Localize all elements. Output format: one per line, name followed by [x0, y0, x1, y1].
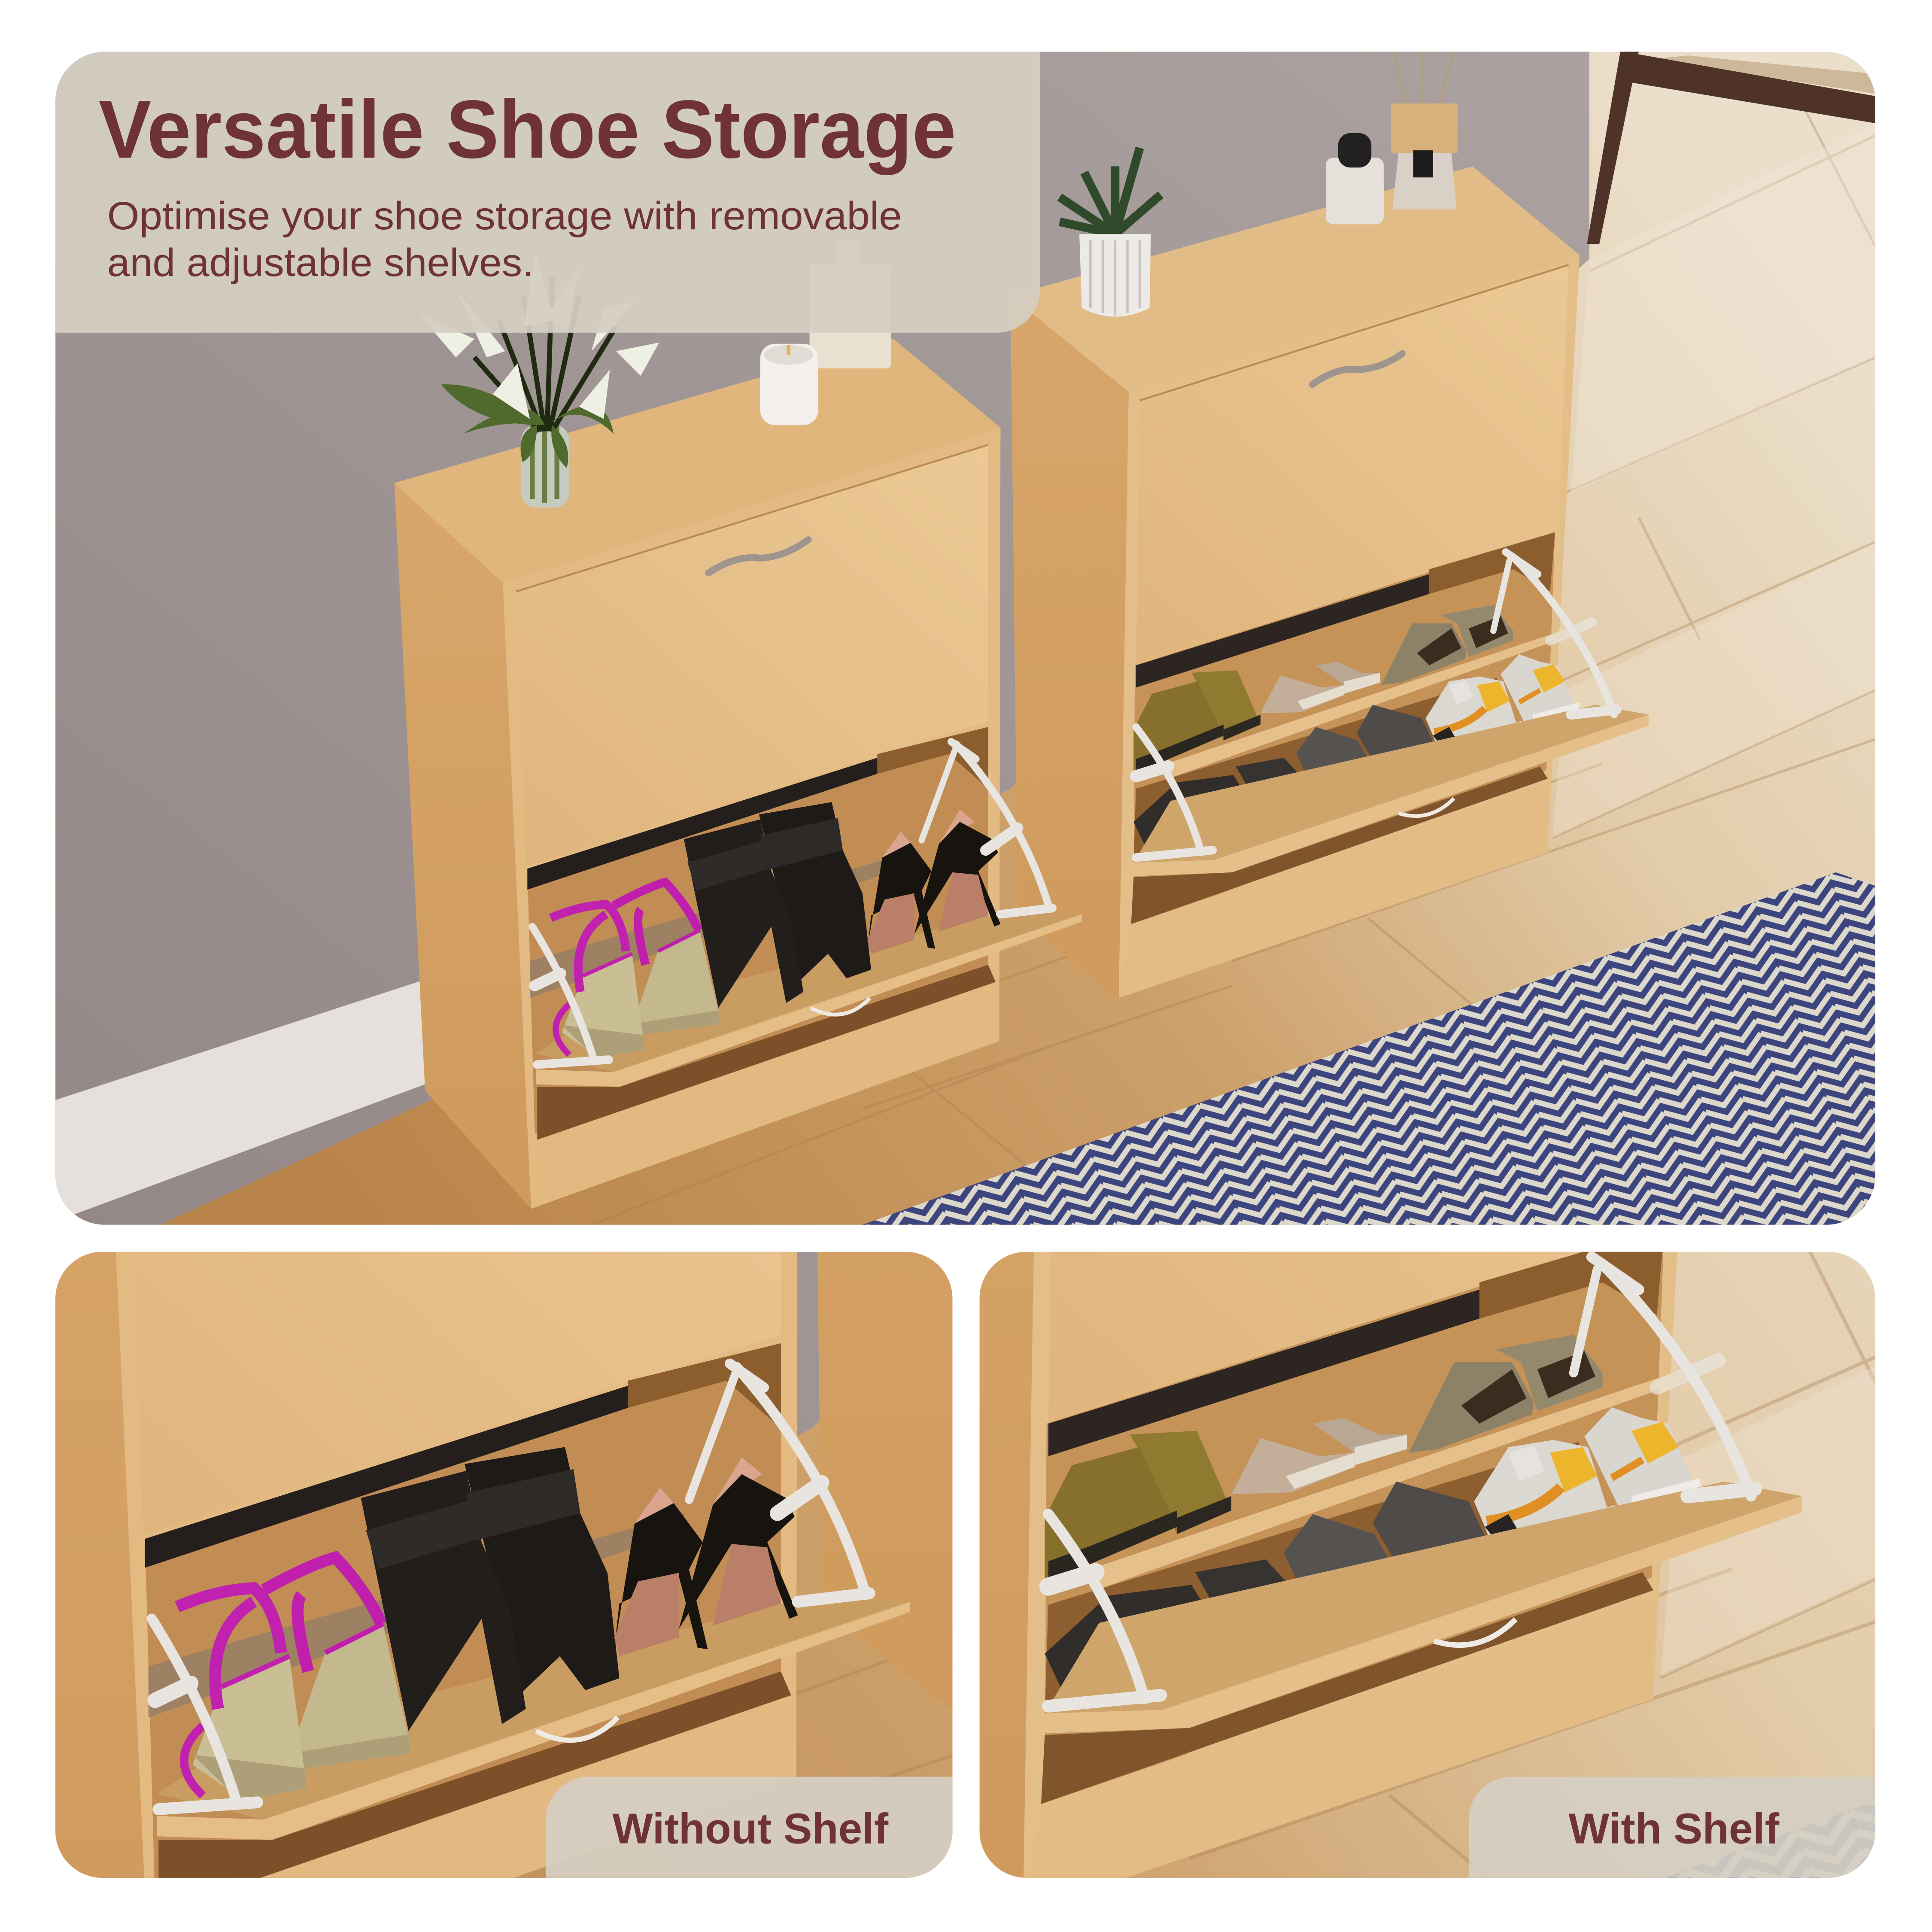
caption: with shelf [1469, 1777, 1875, 1878]
banner background [55, 52, 1040, 333]
front frame [503, 428, 1000, 1209]
title banner: and adjustable shelves. [107, 241, 534, 285]
sneakers [1425, 654, 1580, 765]
caption: without shelf: Without Shelf [612, 1804, 889, 1853]
side panel [394, 483, 531, 1209]
right cabinet decor: plant in pot [1060, 148, 1160, 317]
floor [0, 0, 1932, 1355]
rug [616, 872, 1932, 1355]
door handle [708, 540, 808, 573]
heading: Versatile Shoe Storage [99, 83, 956, 175]
top surface [1010, 166, 1580, 392]
drawer door [1136, 265, 1568, 665]
top surface [394, 339, 1000, 583]
lower drawer [531, 982, 998, 1209]
side panel [1010, 296, 1129, 998]
caption: without shelf [546, 1777, 952, 1878]
ankle boots [684, 802, 871, 1008]
open flap [1133, 705, 1649, 863]
upper row shoes [1133, 605, 1513, 772]
high heels [867, 810, 1000, 954]
flap surface [536, 912, 1082, 1072]
subheading: Optimise your shoe storage with removable [107, 194, 902, 238]
drawer door [516, 445, 988, 866]
right cabinet [1010, 166, 1649, 998]
left cabinet decor: vase of flowers [419, 252, 659, 507]
door handle [1312, 354, 1402, 384]
front frame [1119, 255, 1580, 998]
chair [1587, 52, 1875, 244]
open compartment [1133, 532, 1555, 927]
lower drawer [1119, 782, 1548, 998]
lower row shoes [1133, 705, 1444, 850]
shelf brackets [1136, 552, 1616, 857]
upper shelf [1166, 629, 1570, 779]
left cabinet [394, 339, 1082, 1209]
title banner [55, 52, 1040, 333]
left cabinet decor: candle [760, 240, 891, 425]
shelf brackets [532, 742, 1052, 1065]
baseboard [55, 981, 425, 1214]
room photograph with two cabinets [0, 0, 1932, 1355]
wall [0, 0, 1589, 1355]
open flap edge [536, 914, 1082, 1087]
right cabinet decor: perfume and diffuser [1326, 52, 1458, 224]
sandals [551, 882, 720, 1058]
open compartment [527, 727, 988, 1133]
panel: main room scene [55, 52, 1875, 1225]
caption: with shelf: With Shelf [1568, 1804, 1780, 1853]
